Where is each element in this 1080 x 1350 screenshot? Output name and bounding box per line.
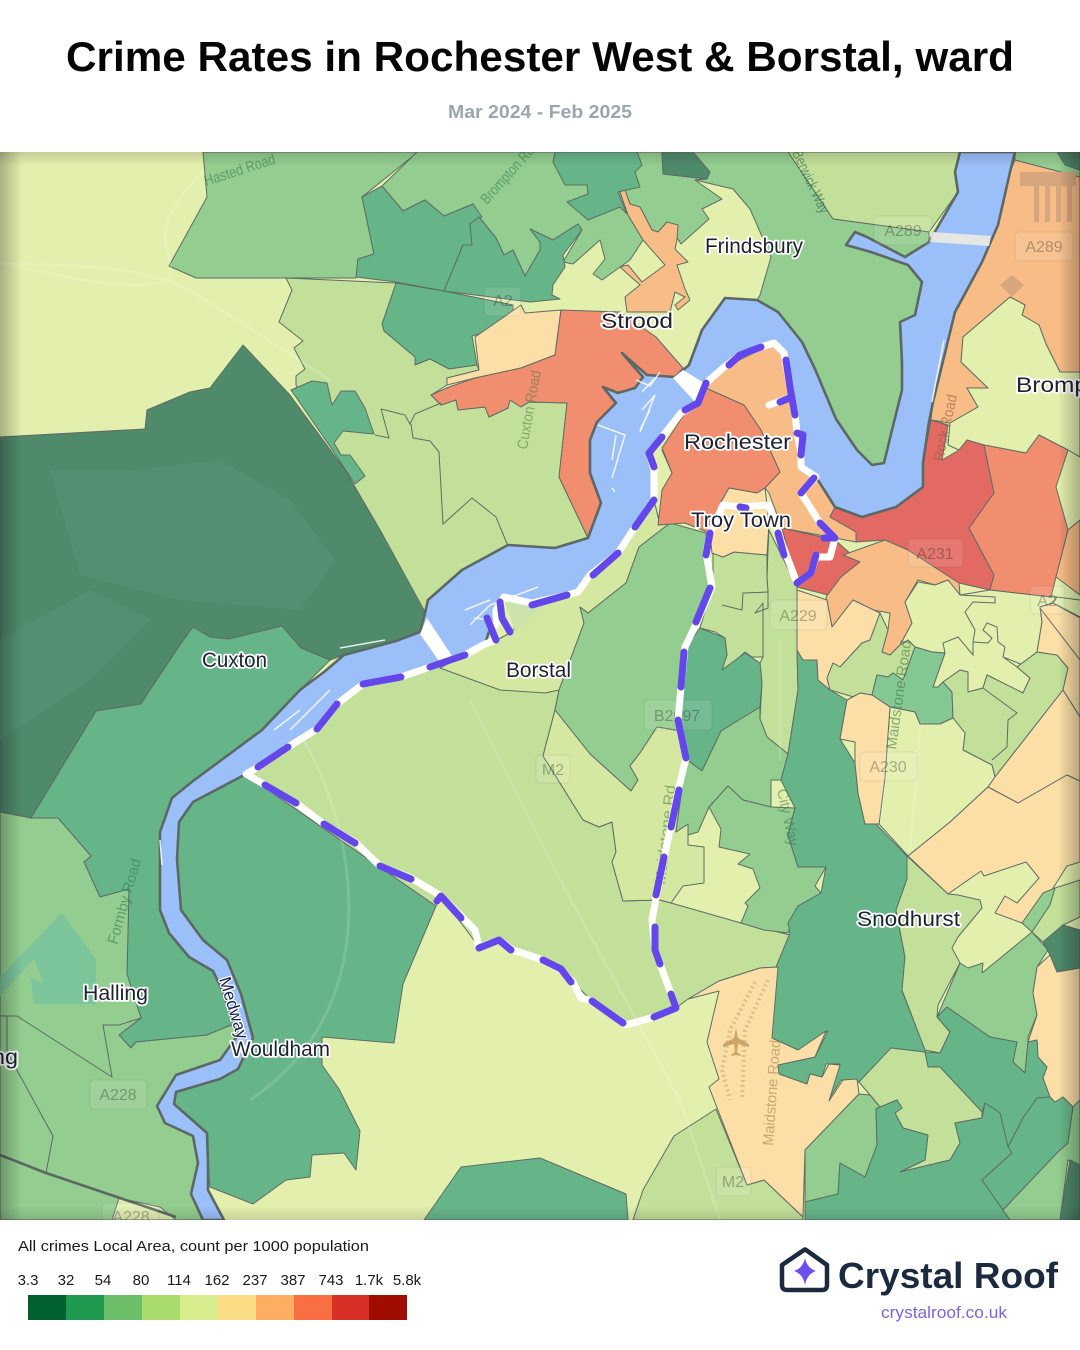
place labels [0,235,1080,1069]
wards: Rock Road and east [797,420,1080,690]
road badges: A289 [884,223,922,240]
legend tick values: 32 [58,1272,74,1289]
place labels: Troy Town [691,509,791,532]
place labels: Medway [215,975,252,1042]
subtitle: date range: Mar 2024 - Feb 2025 [448,102,632,122]
road name labels: Rock Road [930,393,961,463]
place labels: Rochester [684,431,791,454]
road badges: A231 [916,546,954,563]
map area: Medway south wards [174,500,803,1220]
road badges: A228 [99,1087,137,1104]
boundary white casing [246,343,835,1025]
road badges: M2 [542,762,564,779]
wards: south-east mesh [805,580,1080,1220]
ward boundary: Rochester West & Borstal [246,343,835,1025]
icon: house with star [782,1250,827,1290]
road name labels: Maidstone Rd [652,784,679,885]
ward: Snodhurst [771,650,926,1099]
road badges: A230 [869,759,907,776]
place labels: Halling [83,982,148,1005]
legend tick values: 162 [204,1272,230,1289]
lake near Halling [0,913,96,1004]
road name labels [105,143,961,1146]
place labels: Bromp [1016,374,1080,397]
map area: north-west wards [169,152,722,613]
legend colour scale [28,1295,407,1320]
place labels: Frindsbury [705,235,803,258]
map area: forest and Cuxton [0,345,425,1220]
map area: north-east wards [693,152,1080,465]
map area: Borstal east and Maidstone Road [543,523,826,933]
Crystal Roof logo [782,1250,1059,1322]
legend [18,1238,422,1320]
road name labels: Cuxton Road [514,369,545,451]
legend tick values: 387 [280,1272,306,1289]
map edge shading [0,152,1080,1220]
road name labels: City Way [773,787,802,848]
legend tick values: 5.8k [393,1272,422,1289]
icon: airport [723,1028,749,1056]
wards: Rochester centre [658,343,860,595]
place labels: Wouldham [231,1038,330,1061]
legend tick values: 743 [318,1272,344,1289]
place labels: Borstal [506,659,571,682]
road name labels: Hasted Road [202,151,278,190]
River Medway [157,152,1015,1220]
place labels: Cuxton [202,649,267,672]
road badges: A2 [493,293,513,310]
road badges: M2 [722,1174,744,1191]
place labels: Snodhurst [857,908,960,931]
road name labels: Berwick Way [788,148,833,217]
legend tick values: 3.3 [18,1272,38,1289]
inlet land patch [505,602,540,632]
road name labels: Brompton Rd [477,143,538,208]
road badges: A229 [779,608,817,625]
boundary purple dashes [258,347,835,1023]
faint road network [0,170,920,1220]
road name labels: Maidstone Road [883,639,915,751]
legend tick values: 114 [167,1272,191,1289]
logo url: crystalroof.co.uk [881,1304,1008,1322]
road badges: A289 [1025,239,1063,256]
legend tick values [18,1272,422,1289]
ward: airfield [688,967,859,1217]
legend title: All crimes Local Area, count per 1000 population [18,1238,369,1255]
road name labels: Formby Road [105,857,145,946]
bridges [420,232,991,664]
legend tick values: 80 [133,1272,149,1289]
road badges [90,216,1073,1232]
legend tick values: 237 [242,1272,268,1289]
road badges: B2097 [654,708,700,725]
road badges: A228 [112,1209,150,1226]
thin ward boundary lines [0,403,508,1217]
legend tick values: 54 [95,1272,111,1289]
wards: Strood [431,190,690,538]
logo wordmark: Crystal Roof [838,1255,1059,1296]
place labels: Strood [601,310,673,333]
harbour piers [160,340,944,865]
road name labels: Maidstone Road [760,1039,784,1146]
road badges: A2 [1037,593,1057,610]
title: Crime Rates in Rochester West & Borstal, ward [66,33,1014,80]
legend tick values: 1.7k [355,1272,384,1289]
